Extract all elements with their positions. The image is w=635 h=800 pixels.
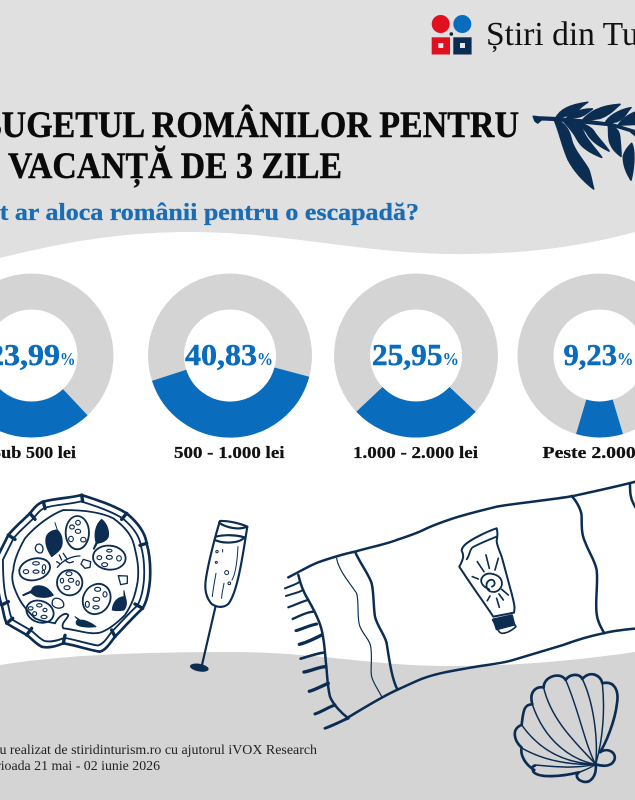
donut chart: Sub 500 lei: % xyxy=(60,349,76,369)
towel fringe xyxy=(285,582,348,728)
pizza toppings xyxy=(17,516,127,626)
donut chart: 1.000 - 2.000 lei: 25,95 xyxy=(372,337,442,372)
logo xyxy=(432,15,635,54)
donut chart: 1.000 - 2.000 lei: % xyxy=(442,349,459,369)
pizza crust xyxy=(0,495,150,652)
donut chart: Peste 2.000 lei: 9,23 xyxy=(564,337,617,372)
donut chart: 500 - 1.000 lei: 40,83 xyxy=(185,337,257,372)
footer background with wave xyxy=(0,652,635,800)
illustration: beach towel xyxy=(285,481,635,728)
icon: champagne glass xyxy=(189,521,247,673)
donut chart: 1.000 - 2.000 lei xyxy=(352,292,480,462)
title: VACANȚĂ DE 3 ZILE xyxy=(8,145,342,188)
pizza topping details xyxy=(23,520,121,619)
footer source text xyxy=(0,743,317,774)
donut chart: Peste 2.000 lei xyxy=(536,292,635,462)
title xyxy=(0,104,519,188)
header background with wave xyxy=(0,0,635,258)
icon: seashell xyxy=(515,674,617,782)
icon: pizza xyxy=(0,495,150,652)
donut chart: 1.000 - 2.000 lei: 1.000 - 2.000 lei xyxy=(353,443,478,462)
towel outline and stripes xyxy=(288,481,635,728)
icon: leaf branch xyxy=(533,102,635,189)
pizza basil leaves xyxy=(23,519,126,627)
donut chart: 500 - 1.000 lei xyxy=(166,292,294,462)
donut chart: 500 - 1.000 lei: 500 - 1.000 lei xyxy=(174,443,285,462)
donut chart: Sub 500 lei xyxy=(0,292,96,462)
icon: sunscreen tube xyxy=(459,528,516,633)
donut chart: Peste 2.000 lei: % xyxy=(617,349,634,369)
donut chart: 500 - 1.000 lei: % xyxy=(257,349,273,369)
